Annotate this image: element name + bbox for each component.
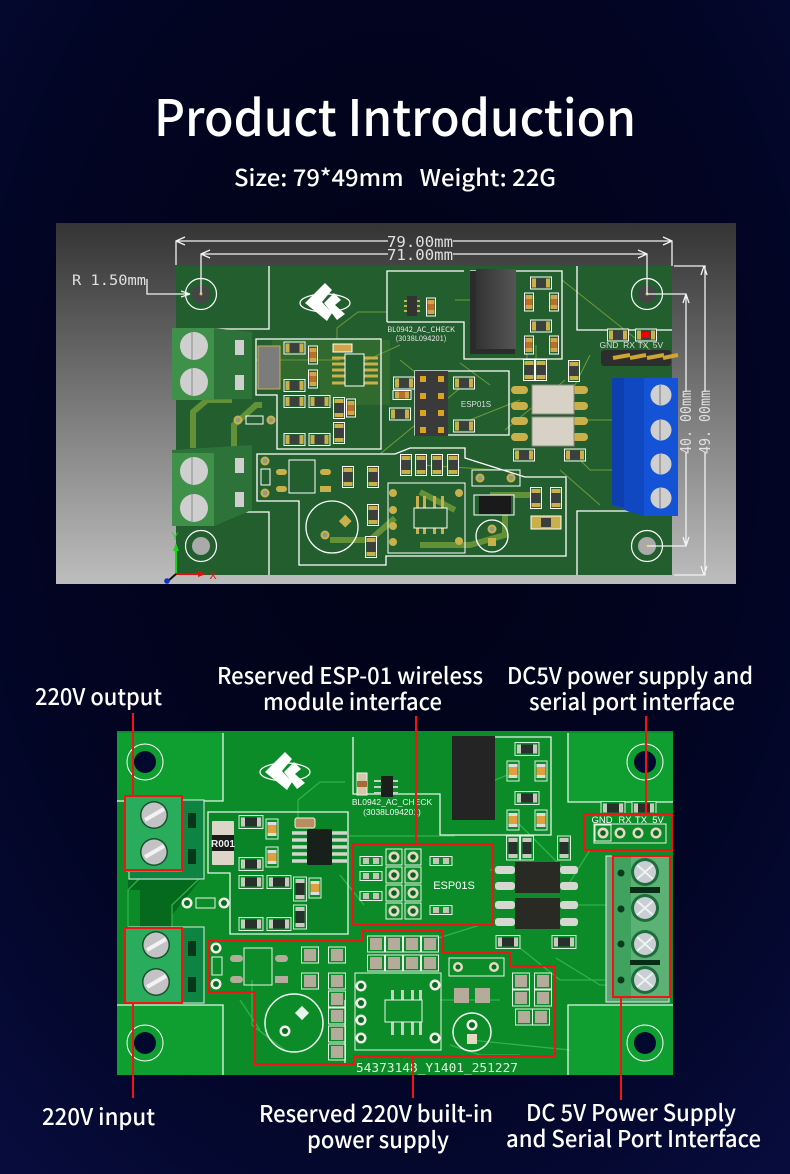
coordinate axes: X (209, 570, 217, 582)
label: Reserved 220V built-in power supply: Reserved 220V built-in (259, 1095, 493, 1129)
silkscreen keep-out outlines (117, 733, 673, 1075)
label: DC5V power supply and serial port interface (507, 657, 753, 717)
leader: ESP-01 (415, 716, 417, 844)
board serial number: 54373148_Y1401_251227 (356, 1061, 518, 1075)
copper pours and traces (117, 733, 673, 1075)
serial pin header with labels: RX (618, 815, 632, 826)
subtitle: size and weight: Size: 79*49mm Weight: 22G (234, 159, 556, 193)
label: DC5V power supply and serial port interface: DC5V power supply and (507, 657, 753, 691)
sense resistor (258, 346, 280, 389)
blue terminal block (612, 378, 678, 516)
title: Product Introduction (154, 79, 636, 151)
copper traces (256, 280, 650, 505)
label: Reserved ESP-01 wireless module interface: module interface (263, 683, 442, 717)
callout: screw terminal box (613, 856, 670, 997)
serial pin header with labels (591, 815, 666, 843)
pin header with labels: 5V (653, 340, 664, 350)
label: DC 5V Power Supply and Serial Port Interface (506, 1094, 761, 1154)
BL0942 silkscreen text (352, 797, 432, 817)
green terminal block lower (172, 445, 252, 526)
dimension lines (147, 237, 707, 575)
leader: 220V input (132, 1003, 134, 1098)
dimension label: 49.00mm: 49. 00mm (696, 390, 714, 454)
large black connector (452, 736, 495, 820)
black diode (474, 495, 514, 515)
label: Reserved 220V built-in power supply: power supply (307, 1121, 449, 1155)
metering chip (292, 829, 347, 865)
mounting holes (186, 278, 662, 562)
label: DC 5V Power Supply and Serial Port Interface: DC 5V Power Supply (526, 1094, 736, 1128)
callout: ESP-01 box (353, 844, 493, 925)
power SMD group (342, 454, 562, 558)
dimension label: 79.00mm: 79.00mm (387, 233, 453, 251)
label: 220V input: 220V input (42, 1098, 155, 1132)
leader: 220V output (132, 713, 134, 796)
top-right SMD group (404, 277, 558, 354)
shunt resistor R001 (211, 821, 235, 865)
green terminal block: AC OUT (126, 797, 204, 879)
ESP01S header pads (360, 849, 452, 919)
BL0942 silkscreen text: BL0942_AC_CHECK (387, 324, 455, 335)
silkscreen keep-out outlines (176, 266, 672, 575)
panel: annotated PCB photo (117, 731, 673, 1075)
panel: PCB dimension drawing (56, 223, 736, 584)
dimension label: 40.00mm: 40. 00mm (677, 390, 695, 454)
top-right SMD parts (496, 742, 656, 948)
label: 220V output: 220V output (35, 678, 162, 712)
pin header with labels: TX (638, 340, 649, 350)
BL0942 silkscreen text: (3038L094201) (363, 807, 421, 817)
label: DC 5V Power Supply and Serial Port Interface: and Serial Port Interface (506, 1120, 761, 1154)
green terminal block upper (172, 328, 252, 400)
leader: DC5V (645, 716, 647, 814)
label: DC5V power supply and serial port interface: serial port interface (529, 683, 735, 717)
red callout boxes and leader lines (125, 713, 672, 1100)
two-pin resistor outline (182, 898, 230, 908)
optocouplers (495, 862, 578, 929)
3D board render (172, 266, 678, 575)
through-hole pads (234, 416, 520, 553)
serial pin header with labels: TX (635, 815, 648, 826)
SOP chip outline and pads (388, 483, 465, 553)
callout: 220V output box (125, 796, 182, 870)
logo (260, 752, 310, 790)
metering chip (332, 354, 378, 386)
shunt resistor R001: R001 (211, 839, 235, 850)
callout: 220V input box (125, 928, 182, 1003)
optocouplers (511, 385, 588, 446)
green terminal block: AC IN (126, 927, 204, 1003)
power supply footprint area (210, 936, 552, 1060)
ESP header (415, 371, 448, 436)
large black component (470, 269, 516, 354)
mounting holes (127, 744, 663, 1061)
ESP01S label: ESP01S (433, 880, 475, 892)
BL0942 silkscreen text: (3038L094201) (396, 333, 446, 344)
green 4-pin terminal block (606, 856, 669, 1002)
label: Reserved 220V built-in power supply (259, 1095, 493, 1155)
ESP side SMDs (390, 329, 656, 461)
ESP01S label: ESP01S (461, 400, 491, 409)
logo (300, 283, 350, 321)
callout: DC5V header box (584, 814, 672, 850)
dimension label: 71.00mm: 71.00mm (387, 246, 453, 264)
small SMD parts (239, 773, 398, 930)
coordinate axes (164, 531, 217, 584)
coordinate axes: Y (171, 531, 179, 543)
resistors and capacitors (284, 342, 356, 446)
pin header with labels: RX (623, 340, 635, 350)
callout: power supply region (209, 931, 555, 1064)
serial pin header with labels: 5V (652, 815, 664, 826)
pin header with labels (600, 340, 678, 366)
pin header with labels: GND (600, 340, 618, 350)
dimension label: R 1.50mm: R 1.50mm (72, 273, 146, 289)
serial pin header with labels: GND (591, 815, 613, 826)
label: Reserved ESP-01 wireless module interface: Reserved ESP-01 wireless (217, 657, 483, 691)
BL0942 silkscreen text (387, 324, 455, 344)
leader: built-in power supply (412, 1056, 414, 1098)
leader: screw terminal (620, 997, 622, 1100)
BL0942 silkscreen text: BL0942_AC_CHECK (352, 797, 432, 807)
label: Reserved ESP-01 wireless module interface (217, 657, 483, 717)
